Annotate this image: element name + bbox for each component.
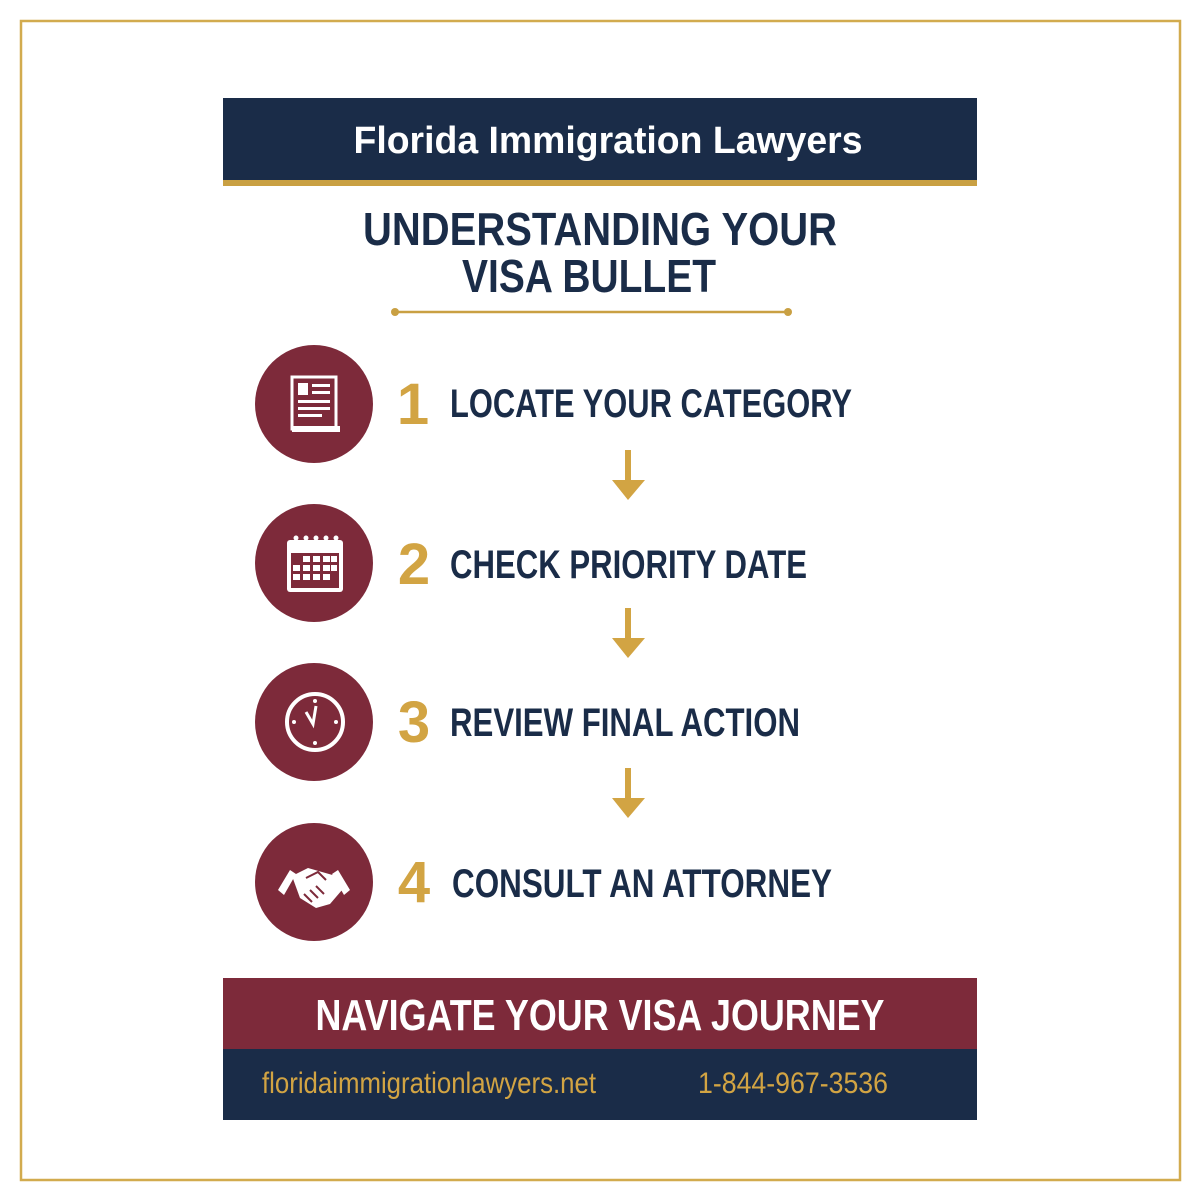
header title: Florida Immigration Lawyers <box>354 120 862 162</box>
footer contact <box>223 1049 977 1120</box>
step 1 <box>255 345 852 463</box>
icon: calendar <box>255 504 373 622</box>
step 4 label: CONSULT AN ATTORNEY <box>452 862 832 906</box>
main heading: VISA BULLET <box>462 250 716 302</box>
icon: handshake <box>255 823 373 941</box>
header banner <box>223 98 977 186</box>
icon: clock <box>255 663 373 781</box>
step 4 <box>255 823 832 941</box>
step 2 <box>255 504 807 622</box>
icon: document <box>255 345 373 463</box>
number 4: 4 <box>398 850 430 915</box>
arrow 3 <box>612 768 645 818</box>
step 3 label: REVIEW FINAL ACTION <box>450 701 800 745</box>
main heading: UNDERSTANDING YOUR <box>363 203 837 255</box>
step 2 label: CHECK PRIORITY DATE <box>450 543 807 587</box>
footer contact: 1-844-967-3536 <box>698 1067 888 1100</box>
gold divider <box>391 308 792 316</box>
arrow 1 <box>612 450 645 500</box>
arrow 2 <box>612 608 645 658</box>
number 2: 2 <box>398 532 430 597</box>
step 1 label: LOCATE YOUR CATEGORY <box>450 382 852 426</box>
number 3: 3 <box>398 690 430 755</box>
footer contact: floridaimmigrationlawyers.net <box>262 1067 597 1100</box>
step 3 <box>255 663 800 781</box>
footer call to action <box>223 978 977 1050</box>
main heading <box>363 203 837 302</box>
footer call to action: NAVIGATE YOUR VISA JOURNEY <box>316 991 884 1040</box>
number 1: 1 <box>397 372 429 437</box>
